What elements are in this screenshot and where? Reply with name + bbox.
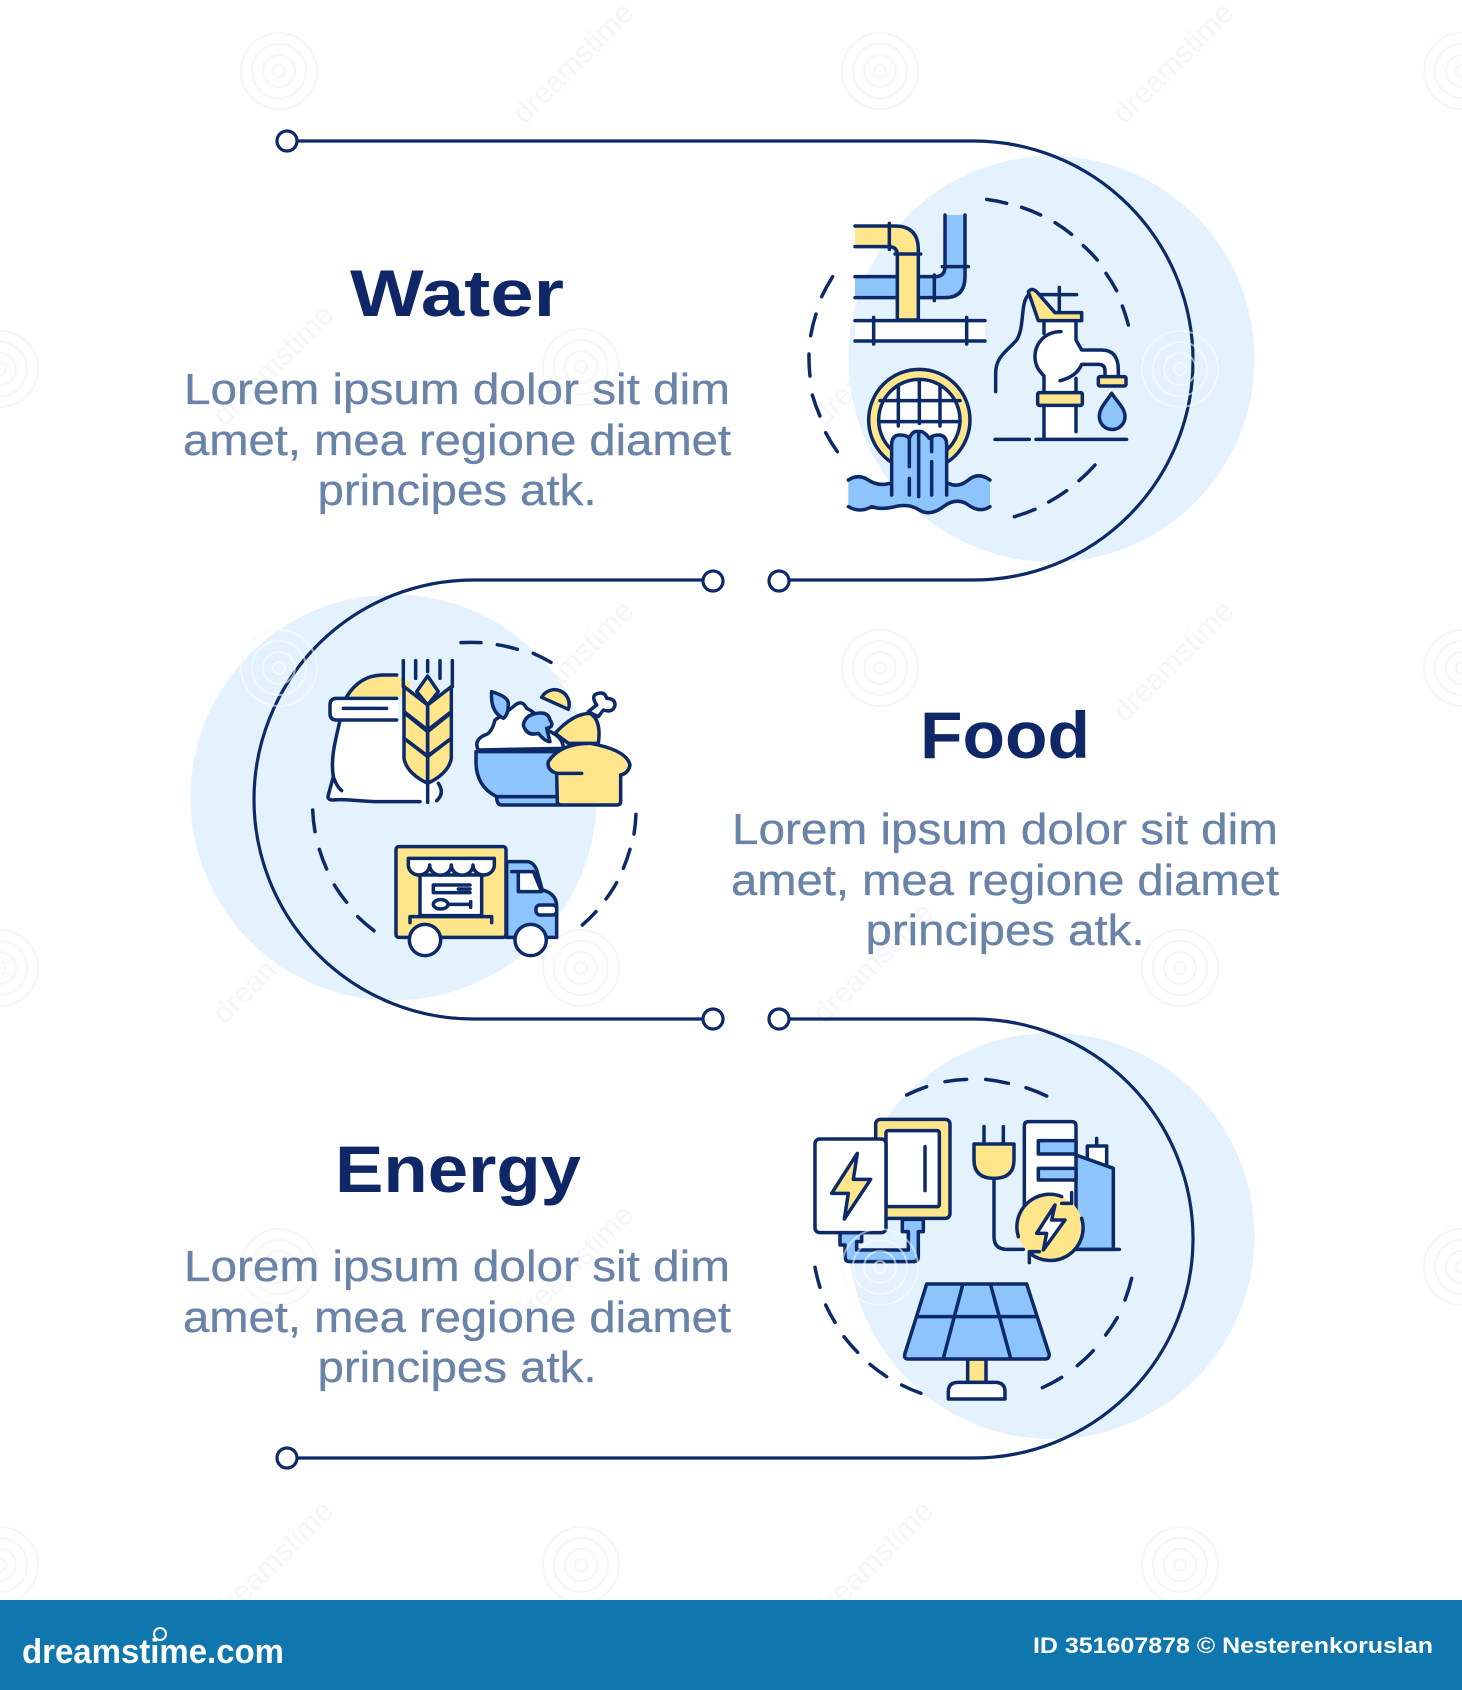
energy connector line	[277, 1009, 1193, 1468]
white pipe	[855, 317, 985, 344]
energy heading: Energy	[335, 1132, 581, 1206]
water body text: Lorem ipsum dolor sit dim	[184, 365, 730, 414]
battery units	[815, 1119, 950, 1262]
water body text: principes atk.	[318, 466, 596, 515]
energy body text	[183, 1242, 731, 1392]
icon: water infrastructure	[809, 199, 1128, 517]
energy body text: amet, mea regione diamet	[183, 1293, 731, 1342]
food truck	[396, 847, 557, 956]
water heading: Water	[350, 256, 564, 330]
footer credit: ID 351607878 © Nesterenkoruslan	[1033, 1633, 1433, 1658]
water connector line	[277, 131, 1193, 591]
blue pipe	[855, 215, 968, 301]
bread loaf	[548, 743, 630, 805]
dashed ring	[815, 1079, 1132, 1393]
footer bar	[0, 1600, 1462, 1690]
infographic canvas: dreamstime	[806, 1494, 940, 1628]
grain sack	[328, 675, 441, 802]
energy body text: principes atk.	[318, 1343, 596, 1392]
infographic canvas: dreamstime	[506, 1198, 640, 1332]
infographic canvas: dreamstime	[806, 298, 940, 432]
icon: food supply	[313, 642, 636, 956]
dashed ring	[809, 199, 1128, 517]
infographic canvas: dreamstime	[1106, 594, 1240, 728]
food body text: amet, mea regione diamet	[731, 856, 1279, 905]
panel: food	[190, 571, 1279, 1029]
plug and building	[974, 1122, 1119, 1263]
infographic canvas: dreamstime	[206, 298, 340, 432]
footer logo: dreamstime.com	[22, 1633, 284, 1671]
food body text	[731, 805, 1279, 955]
dashed ring	[313, 642, 636, 931]
wheat ear	[403, 661, 452, 802]
water body text	[183, 365, 731, 515]
food connector line	[254, 571, 723, 1029]
meal bowl	[476, 690, 615, 805]
food body text: principes atk.	[866, 906, 1144, 955]
water background circle	[848, 156, 1254, 562]
yellow pipe	[855, 223, 921, 320]
water outlet	[848, 369, 990, 513]
energy body text: Lorem ipsum dolor sit dim	[184, 1242, 730, 1291]
infographic canvas: dreamstime	[806, 896, 940, 1030]
hand pump	[995, 287, 1127, 439]
food body text: Lorem ipsum dolor sit dim	[732, 805, 1278, 854]
infographic canvas: dreamstime	[506, 0, 640, 130]
panel: water	[183, 131, 1254, 591]
icon: energy sources	[815, 1079, 1132, 1399]
infographic canvas: dreamstime	[1106, 0, 1240, 130]
infographic canvas: dreamstime	[206, 1494, 340, 1628]
infographic canvas: dreamstime	[506, 594, 640, 728]
panel: energy	[183, 1009, 1254, 1468]
food heading: Food	[920, 698, 1090, 772]
energy background circle	[848, 1033, 1254, 1439]
solar panel	[905, 1284, 1049, 1399]
infographic canvas: dreamstime	[206, 896, 340, 1030]
infographic canvas: dreamstime	[1106, 1198, 1240, 1332]
water body text: amet, mea regione diamet	[183, 416, 731, 465]
watermark marks over pale circles	[241, 331, 1218, 1305]
food background circle	[190, 594, 596, 1000]
